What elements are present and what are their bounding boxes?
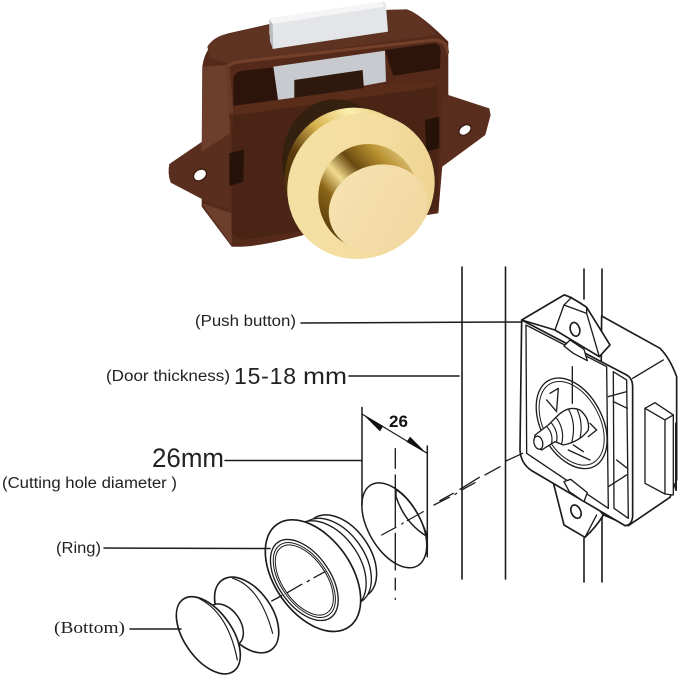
dimension number 26: 26 xyxy=(389,412,408,431)
housing ridge xyxy=(633,360,663,378)
side of body xyxy=(202,65,230,152)
gold ring side xyxy=(285,108,423,249)
top face of body xyxy=(207,9,437,63)
knob neck xyxy=(199,597,251,653)
silver plate xyxy=(273,51,386,102)
axis dashes xyxy=(440,453,523,501)
label: 15-18 mm: 15-18 xyxy=(234,363,296,389)
top clip xyxy=(564,340,587,361)
label: cutting hole diameter: (Cutting hole diameter ) xyxy=(2,475,177,492)
ring hole xyxy=(318,144,418,249)
vertical centre line xyxy=(393,449,397,599)
bottom clip xyxy=(564,479,587,502)
knob back disc xyxy=(201,566,292,664)
hole ellipse xyxy=(348,472,440,579)
hole axis xyxy=(382,512,423,535)
front plate inner xyxy=(526,325,608,508)
front face plate xyxy=(232,85,439,239)
latch body back xyxy=(202,9,448,247)
knob front cap xyxy=(163,586,253,676)
label: bottom: (Bottom) xyxy=(54,618,125,637)
right mounting ear xyxy=(440,93,491,168)
hole back edge xyxy=(396,489,427,537)
circular recess xyxy=(522,366,622,481)
cylinder edges xyxy=(362,407,427,557)
top ear hole xyxy=(569,321,581,337)
spindle xyxy=(535,408,589,450)
side slot xyxy=(613,372,628,518)
label: ring: (Ring) xyxy=(56,540,101,557)
ring inner edges xyxy=(257,527,352,633)
label: 15-18 mm: mm xyxy=(303,363,347,389)
product photo: brown latch with gold button xyxy=(169,2,491,289)
plate notch xyxy=(294,70,364,100)
rear axis dash xyxy=(434,483,475,505)
leader lines xyxy=(104,322,522,629)
front plate outer rim xyxy=(520,320,633,526)
ring rear thread xyxy=(290,502,391,612)
slider rectangle xyxy=(645,403,673,495)
silver tab xyxy=(269,2,388,49)
label: 26mm: 26mm xyxy=(152,443,224,473)
bottom ear hole xyxy=(569,503,583,520)
cutting hole and parts line drawing xyxy=(163,407,475,676)
bottom mounting ear xyxy=(553,483,603,537)
top mounting ear xyxy=(522,295,610,357)
mounting hole right xyxy=(457,122,473,138)
openings xyxy=(233,67,278,106)
rear housing xyxy=(600,316,677,526)
left mounting ear xyxy=(169,131,230,208)
rim highlight xyxy=(227,40,448,67)
lock body line drawing xyxy=(440,295,677,537)
clips xyxy=(229,149,244,186)
dimension line with arrows xyxy=(362,414,427,453)
ring axis dash xyxy=(272,572,325,601)
gold ring face xyxy=(257,83,465,289)
mounting hole left xyxy=(191,167,209,183)
label: push button: (Push button) xyxy=(195,313,296,330)
button face xyxy=(316,151,440,265)
ring flange xyxy=(246,502,380,649)
door panel vertical lines xyxy=(462,267,602,582)
label: door thickness: (Door thickness) xyxy=(106,368,230,385)
gold ring rear shadow xyxy=(282,99,388,221)
